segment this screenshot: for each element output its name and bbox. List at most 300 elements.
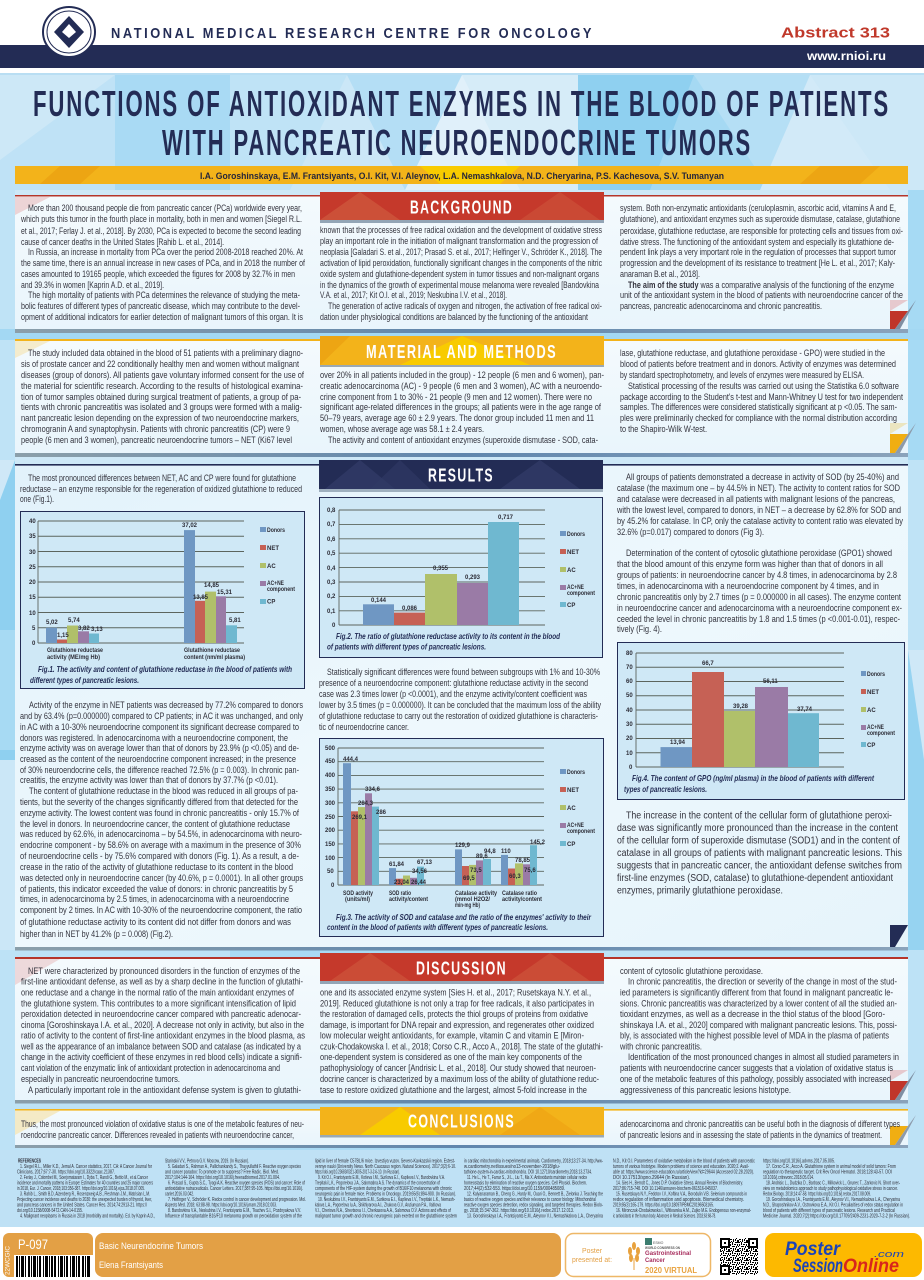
text: discussion middle column: 2019]. Reduced glutathione is not only a trap for free radicals, it also participates in	[320, 998, 594, 1008]
panel: material and methods	[15, 336, 916, 457]
text: results middle column: lower by 3.5 times (p = 0.000000). It can be concluded that the maximum loss of the ability	[319, 700, 601, 710]
caption: figure 4: types of pancreatic lesions.	[624, 784, 707, 794]
text: methods middle column: crine component from 1 to 30% - 21 people (9 men and 12 women). There were no	[320, 392, 592, 402]
panel: results	[15, 460, 908, 950]
heading: conclusions	[320, 1107, 604, 1138]
caption: figure 2: Fig.2. The ratio of glutathione reductase activity to its content in the blood	[336, 631, 561, 641]
icon: wheat	[628, 1242, 640, 1270]
axis and value labels: activity/content	[502, 897, 542, 903]
authors bar	[15, 166, 908, 184]
axis and value labels: min-mg Hb)	[455, 903, 480, 909]
text: background left column: and 39.3% in women [Kaprin A.D. et al., 2019].	[21, 280, 164, 290]
axis and value labels: 0,144	[371, 598, 387, 604]
text: methods left column: tients with chronic pancreatitis was isolated and 3 groups were formed with a malig-	[21, 402, 302, 412]
text: discussion middle column: czuk-Chodakowska I. et al., 2018; Corso C.R., Acco A., 2018]. The state of the glutathi-	[320, 1042, 603, 1052]
axis and value labels: 0,1	[327, 609, 336, 615]
references: N.D., Kit O.I. Parameters of oxidative metabolism in the blood of patients with pancreatic	[613, 1158, 755, 1164]
axis and value labels: 80	[626, 651, 633, 657]
text: results intro: The most pronounced differences between NET, AC and CP were found for glutathione	[28, 473, 296, 483]
title	[33, 83, 890, 163]
footer: congress badge: WORLD CONGRESS ON	[645, 1246, 680, 1250]
text: methods right column: to the Shapiro-Wilk W-test.	[620, 424, 707, 434]
text: results middle column: of glutathione reductase to carry out the restoration of oxidized glutathione is characteris-	[319, 711, 598, 721]
abstract number: Abstract 313	[781, 24, 890, 42]
axis and value labels: 50	[327, 869, 334, 875]
axis and value labels: Glutathione reductase	[184, 648, 241, 654]
axis and value labels: 78,85	[515, 858, 531, 864]
axis and value labels: 0,717	[498, 515, 514, 521]
bars: catalase activity	[455, 849, 491, 885]
axis and value labels: Glutathione reductase	[47, 648, 104, 654]
axis and value labels: 14,85	[204, 583, 220, 589]
legend: component	[567, 829, 595, 835]
footer: category and author	[95, 1233, 561, 1277]
text: results intro	[20, 473, 302, 504]
text: background left column: the same time, there is an annual increase in new cases of PCa, and in 2018 the number of	[21, 258, 305, 268]
text: conclusions left column: roendocrine pancreatic cancer. Differences revealed in patients with neuroendocrine cancer,	[21, 1130, 294, 1140]
axis and value labels: SOD activity	[343, 891, 374, 897]
axis and value labels: 200	[325, 828, 336, 834]
axis and value labels: 15,31	[217, 590, 233, 596]
text: conclusions right column	[620, 1119, 900, 1140]
references: ic antioxidants in the human body. Advances in Medical Sciences. 2018;63:68-78.	[613, 1214, 716, 1220]
text: background right column with aim	[620, 203, 903, 311]
text: results right column conclusion: The increase in the content of the cellular form of glutathione peroxi-	[626, 810, 892, 822]
references: REFERENCES	[18, 1158, 41, 1164]
references: 4. Malignant neoplasms in Russia in 2018 (morbidity and mortality). Ed. by Kaprin A.D.,	[20, 1214, 155, 1220]
bars: SOD activity	[343, 763, 379, 885]
footer: congress badge: Cancer	[645, 1257, 665, 1264]
text: results left column: the level in donors. In neuroendocrine cancer, the content of glutathione reductase	[20, 819, 290, 829]
caption: figure 3: content in the blood of patients with different types of pancreatic lesions.	[327, 922, 548, 932]
axis and value labels: 0,7	[327, 522, 336, 528]
text: results left column: donors was registered. In adenocarcinoma with a neuroendocrine component, the	[20, 733, 288, 743]
footer: category and author: Elena Frantsiyants	[99, 1260, 163, 1270]
axis and value labels: 75,6	[524, 868, 536, 874]
axis and value labels: 450	[325, 759, 336, 765]
axis and value labels: 10	[626, 751, 633, 757]
text: discussion right column: content of cytosolic glutathione peroxidase.	[620, 966, 763, 976]
text: discussion middle column: docrine cancer is characterized by a maximum loss of the ability of glutathione reduc-	[320, 1074, 599, 1084]
references: https://doi.org/10.1016/j.advms.2017.05.005.	[763, 1158, 835, 1164]
references: homeostasis by elimination of reactive oxygen species. Cell Physiol. Biochem.	[464, 1180, 587, 1186]
text: discussion left column: well as the appearance of an imbalance between SOD and catalase (as indicated by a	[20, 1042, 301, 1052]
text: discussion right column	[619, 966, 899, 1095]
axis and value labels: 10	[29, 611, 36, 617]
text: discussion middle column: low molecular weight antioxidants, for example, vitamin C and vitamin E [Miron-	[320, 1030, 584, 1040]
caption: figure 1: Fig.1. The activity and content of glutathione reductase in the blood of patients with	[38, 664, 292, 674]
bars: activity	[46, 626, 99, 643]
references: tathione-system-in-cardiac-mitochondria. DOI 10.12710/cardiometry.2018.13.2734.	[464, 1170, 592, 1176]
bars: content	[184, 530, 237, 643]
references: antioxidative nutraceuticals. Cancer Letters. 2017;387:95-105. https://doi.org/10.1016/j.	[165, 1186, 303, 1192]
text: methods middle column	[319, 370, 604, 445]
legend: NET	[567, 788, 579, 794]
legend: AC	[267, 564, 276, 570]
text: background left column: The high mortality of patients with PCa determines the relevance of studying the meta-	[28, 290, 300, 300]
text: discussion middle column: the restoration of damaged cells, protects the thiol groups of proteins from oxidative	[320, 1009, 588, 1019]
axis and value labels: 13,85	[193, 595, 209, 601]
legend	[560, 769, 595, 848]
axis and value labels: 150	[325, 842, 336, 848]
axis and value labels: 269,1	[352, 815, 368, 821]
caption: figure 1: different types of pancreatic lesions.	[30, 675, 139, 685]
references: V.I., Cheriova N.A., Shevtsova I.I., Cherkasova A.A., Salomova O.V. Actions and effects of	[315, 1208, 451, 1214]
footer: congress badge: ESMO	[653, 1241, 664, 1245]
text: background middle column: activation of lipid peroxidation, functionally significant changes in the components of the nitric	[320, 258, 602, 268]
text: results middle column: Statistically significant differences were found between subgroups with 1% and 10-30%	[327, 667, 600, 677]
text: background left column: et al., 2017; Ferlay J. et al., 2018]. By 2030, PCa is expected to become the second leading	[21, 226, 301, 236]
references: 12. Kalyanaraman B., Cheng G., Hardy M., Ouari O., Bennett B., Zielonka J. Teaching the	[467, 1192, 603, 1198]
text: discussion left column: A particularly important role in the antioxidant defense system is given to glutathi-	[28, 1085, 301, 1095]
text: background middle column: play an important role in the initiation of malignant transformation and the progression of	[320, 236, 598, 246]
chart: figure 1 glutathione reductase	[20, 512, 304, 688]
references: DOI 10.17513/spno.29644 (In Russian).	[613, 1175, 690, 1181]
axis and value labels: Catalase ratio	[502, 891, 537, 897]
caption: figure 3	[327, 912, 592, 932]
footer background	[0, 1227, 924, 1280]
text: background left column: opment of additional indicators for earlier detection of malignant tumors of this organ. It is	[21, 312, 303, 322]
axis and value labels: 40	[626, 708, 633, 714]
text: methods left column: sis of prostate cancer and 22 conditionally healthy men and women without malignant	[21, 359, 299, 369]
axis and value labels: 23,04	[394, 880, 410, 886]
references: redox regulation of inflammation and apoptosis. Biomedical chemistry.	[613, 1197, 744, 1203]
references: incidence and mortality patterns in Europe: Estimates for 40 countries and 25 major cancers	[17, 1180, 153, 1186]
text: background middle column: in the dynamics of the growth of experimental mouse melanoma were revealed [Bandovkina	[320, 280, 599, 290]
axis and value labels: 0	[332, 623, 336, 629]
axis and value labels: 286	[376, 810, 387, 816]
caption: figure 4	[624, 773, 875, 794]
axis and value labels: 13,94	[670, 740, 686, 746]
panel: discussion	[15, 953, 916, 1104]
references: 13. Goroshinskaya I.A., Frantsiyants E.M., Aleynov V.I., Nemashkalova L.A., Cheryarina	[467, 1214, 603, 1220]
footer: category and author: Basic Neurendocrine Tumors	[99, 1241, 203, 1251]
axis and value labels: 0	[32, 641, 36, 647]
text: results middle column	[319, 667, 601, 732]
text: methods middle column: over 20% in all patients included in the group) - 12 people (6 men and 6 women), pan-	[320, 370, 604, 380]
bars: GPO content	[660, 672, 819, 767]
legend	[560, 531, 595, 609]
references: 15. Rusetskaya N.Y., Fedotov I.V., Koftina V.A., Borodulin V.B. Selenium compounds in	[616, 1192, 747, 1198]
text: discussion middle column: tase to restore oxidized glutathione and the largest, almost 5-fold increase in the	[320, 1085, 587, 1095]
legend	[861, 671, 895, 749]
references: reactive oxygen species detection, redox signaling, and targeted therapies. Redox Biolo-	[464, 1202, 603, 1208]
text: discussion left column: NET were characterized by pronounced disorders in the function of enzymes of the	[28, 966, 300, 976]
text: methods middle column: 50–79 years, average age 60 ± 2.9 years. The donor group included 11 men and 11	[320, 413, 594, 423]
text: discussion middle column: pathophysiology of cancer [Andrisic L. et al., 2018]. Our study showed that neuroen-	[320, 1063, 596, 1073]
text: results left column: of 30% neuroendocrine cells, the difference reached 72.5% (p = 0.003). In chronic pan-	[20, 765, 299, 775]
legend: CP	[567, 603, 575, 609]
text: results left column: tients, but the severity of the changes significantly differed from that detected for the	[20, 797, 298, 807]
authors bar: I.A. Goroshinskaya, E.M. Frantsiyants, O.I. Kit, V.I. Aleynov, L.A. Nemashkalova, N.D. Cheryarina, P.S. Kachesova, S.V. Tumanyan	[200, 171, 724, 181]
text: results left column: endocrine component - by 58.6% on average with a maximum in the presence of 30%	[20, 840, 301, 850]
text: discussion left column: first-line antioxidant defense, as well as by a sharp decline in the function of glutathi-	[21, 976, 303, 986]
references: 10.1016/j.critrevonc.2018.05.014.	[763, 1175, 814, 1181]
text: background middle column: dation under physiological conditions are balanced by the functioning of the antioxidant	[320, 312, 588, 322]
axis and value labels: 15	[29, 595, 36, 601]
axis and value labels: 0,355	[433, 566, 449, 572]
bars: ratio	[363, 522, 519, 625]
header band	[0, 0, 924, 73]
text: background middle column: V.A. et al., 2017; Kit O.I. et al., 2019; Neskubina I.V. et al., 2018].	[320, 290, 507, 300]
heading: material and methods	[320, 336, 604, 367]
references: 7. Helfinger V., Schröder K. Redox control in cancer development and progression. Mol.	[168, 1197, 306, 1203]
text: methods middle column: women, whose average age was 58.1 ± 2.4 years.	[319, 424, 484, 434]
legend: component	[267, 587, 295, 593]
axis and value labels: 89,6	[476, 854, 488, 860]
axis and value labels: activity/content	[389, 897, 428, 903]
heading: discussion: DISCUSSION	[416, 958, 507, 978]
text: results left column: times, in adenocarcinoma by 2.5 times, in adenocarcinoma with a neuroendocrine	[20, 894, 289, 904]
references: 16. Mironczuk-Chodakowska I., Witkowska A.M., Zujko M.E. Endogenous non-enzymat-	[616, 1208, 751, 1214]
text: background left column: In Russia, an increase in mortality from PCa over the period 2008-2018 reached 20%. At	[28, 247, 303, 257]
heading: background	[320, 192, 604, 223]
text: results right column upper: that the blood amount of this enzyme form was higher than that of donors in all	[617, 559, 883, 569]
text: results right column upper: 32.6% (p=0.017) compared to donors (Fig 3).	[617, 527, 764, 537]
axis and value labels: 69,5	[463, 876, 475, 882]
references: 5. Galadari S., Rahman A., Pallichankandy S., Thayyullathil F. Reactive oxygen species	[168, 1164, 301, 1170]
axis and value labels: 284,3	[358, 801, 374, 807]
axis and value labels: 61,84	[389, 862, 405, 868]
references: gy. 2018;15:347-362. https://doi.org/10.1016/j.redox.2017.12.013.	[464, 1208, 574, 1214]
axis and value labels: 67,13	[417, 860, 433, 866]
text: discussion left column: cinoma [Goroshinskaya I.A. et al., 2020]. A decrease not only in activity, but also in the	[21, 1020, 304, 1030]
footer: PosterSessionOnline logo: .com	[874, 1249, 905, 1259]
text: discussion right column: aggressiveness of this pancreatic lesions histotype.	[620, 1085, 791, 1095]
axis and value labels: 100	[325, 856, 336, 862]
legend: AC+NE	[867, 725, 884, 731]
text: results intro: one (Fig.1).	[20, 494, 54, 504]
text: results right column conclusion: first-line enzymes (SOD, catalase) to glutathione-dependent antioxidant	[617, 873, 893, 884]
references: able at: https://www.science-education.ru/article/view?id=29644 (Accessed 02.28.2020).	[613, 1170, 754, 1176]
legend: Donors	[567, 770, 586, 776]
footer: congress badge: Poster	[582, 1248, 603, 1255]
axis and value labels: 94,8	[484, 849, 496, 855]
axis and value labels: Catalase activity	[455, 891, 498, 897]
axis and value labels: 73,5	[470, 868, 482, 874]
institute name: NATIONAL MEDICAL RESEARCH CENTRE FOR ONCOLOGY	[111, 25, 594, 42]
axis and value labels	[626, 651, 813, 771]
text: results left column: and by 63.4% (p=0.000000) compared to CP patients; in AC it was unchanged, and only	[20, 711, 303, 721]
bars: SOD ratio	[389, 867, 424, 885]
axis and value labels: 350	[325, 787, 336, 793]
chart: figure 2 ratio	[320, 498, 602, 658]
references: 2. Ferlay J., Colombet M., Soerjomataram I., Dyba T., Randi G., Bettio M., et al.Cancer	[20, 1175, 148, 1181]
legend: CP	[267, 600, 275, 606]
references: 2017;104:144-164. https://doi.org/10.1016/j.freeradbiomed.2017.01.004.	[165, 1175, 280, 1181]
text: methods left column: nant pancreatic lesion depending on the expression of two neuroendocrine markers,	[21, 413, 299, 423]
legend: CP	[867, 743, 875, 749]
heading: material and methods: MATERIAL AND METHODS	[366, 342, 557, 362]
heading: results: RESULTS	[428, 466, 494, 486]
text: methods left column: The study included data obtained in the blood of 51 patients with a preliminary diagno-	[28, 348, 303, 358]
text: results left column: crease in the ratio of the activity of glutathione reductase to its content in the blood	[20, 862, 293, 872]
panel: conclusions	[15, 1107, 916, 1148]
text: methods left column: tion of tumor samples obtained during surgical treatment of patients, a group of pa-	[21, 392, 301, 402]
axis and value labels: 5,81	[229, 618, 241, 624]
axis and value labels: content (nm/ml plasma)	[184, 655, 245, 661]
text: conclusions left column	[21, 1119, 304, 1140]
axis and value labels: 40	[29, 519, 36, 525]
text: results right column upper	[616, 472, 903, 634]
references: 2017;86:715-748. DOI 10.1146/annurev-biochem-061516-045037.	[613, 1186, 718, 1192]
text: methods left column: chromogranin A and synaptophysin. Patients with chronic pancreatitis (CP) were 9	[21, 424, 290, 434]
references: in 2018, Eur. J. Cancer, 2018;103:356-387. https://doi.org/10.1016/j.ejca.2018.07.005.	[17, 1186, 145, 1192]
text: background middle column	[320, 225, 602, 322]
legend: Donors	[867, 672, 886, 678]
references: 10. Neskubina I.V., Frantsiyants E.M., Surikova E.I., Kaplieva I.V., Trepitaki L.K., Nemash-	[318, 1197, 455, 1203]
axis and value labels	[325, 746, 546, 909]
text: discussion left column: cant violation of the enzymatic link of antioxidant protection in adenocarcinoma and	[21, 1063, 280, 1073]
caption: figure 1	[30, 664, 292, 685]
text: conclusions left column: Thus, the most pronounced violation of oxidative status is one of the metabolic features of neu-	[21, 1119, 304, 1129]
text: results left column: creased as the content of the neuroendocrine component increased; in the presence	[20, 754, 296, 764]
text: results right column upper: tively (Fig. 4).	[617, 624, 662, 634]
text: results left column: enzyme activity. The lowest content was found in chronic pancreatitis - only 15.7% of	[20, 808, 299, 818]
axis and value labels: SOD ratio	[389, 891, 411, 897]
text: results left column: was detected only in neuroendocrine cancer (by 40.6%, p = 0.0001). In all other groups	[19, 873, 303, 883]
legend: NET	[267, 546, 279, 552]
text: discussion left column: especially in pancreatic neuroendocrine tumors.	[21, 1074, 180, 1084]
text: background left column: which puts this tumor in the fourth place in mortality, both in men and women [Siegel R.L.	[20, 214, 302, 224]
text: discussion left column: ratio of activity to the content of first-line antioxidant enzymes in the blood plasma, as	[21, 1030, 305, 1040]
references: Influence of transplantable B16/F10 melanoma growth on peroxidation system of the	[165, 1214, 302, 1220]
legend: AC	[567, 568, 576, 574]
axis and value labels: 39,28	[733, 704, 749, 710]
references: in cardiac mitochondria in experimental animals. Cardiometry, 2018;13:27-34. http://ww-	[464, 1158, 603, 1164]
references: 2017;44(2):532-553. https://doi.org/10.1159/000485089.	[464, 1186, 565, 1192]
axis and value labels: 0	[629, 765, 633, 771]
axis and value labels: 35	[29, 534, 36, 540]
references: kalova L.A., Pogorelova Iu.A., Shikhlyarova A.I., Zhukova G.V., Arutiunyan P.A., Vaitkova	[315, 1202, 441, 1208]
references: components of the HIF-system during the growth of B16/F10 melanoma with chronic	[315, 1186, 452, 1192]
legend: NET	[567, 550, 579, 556]
text: results right column conclusion	[617, 810, 902, 896]
text: results intro: reductase – an enzyme responsible for the regeneration of oxidized glutathione to reduced	[20, 484, 302, 494]
axis and value labels: (mmol H2O2/	[455, 897, 490, 903]
footer: PosterSessionOnline logo	[765, 1233, 922, 1277]
text: discussion middle column: one-dependent system is considered as one of the main key components of the	[320, 1052, 582, 1062]
axis and value labels: 444,4	[343, 757, 359, 763]
references: lipid in liver of female C57BL/6 mice. Izvestiya vuzov. Severo-Kavkazskii region. Estest-	[315, 1158, 455, 1164]
axis and value labels: 500	[325, 746, 336, 752]
text: discussion right column: with chronic pancreatitis.	[619, 1042, 702, 1052]
axis and value labels: 37,74	[797, 707, 813, 713]
text: results right column upper: times, in adenocarcinoma with a neuroendocrine component by 4 times, and in	[617, 581, 879, 591]
text: results middle column: case was 2.3 times lower (p <0.0001), and the enzyme activity/content coefficient was	[319, 689, 587, 699]
references: 6. Prasad S., Gupta S.C., Tyagi A.K. Reactive oxygen species (ROS) and cancer: Role of	[168, 1180, 305, 1186]
text: results left column: of neuroendocrine cells - by 75.6% compared with donors (Fig. 1). As a result, a de-	[20, 851, 299, 861]
text: results left column: component by 2 times. In AC with 10-30% of the neuroendocrine component, the ratio	[20, 905, 302, 915]
heading: background: BACKGROUND	[410, 198, 513, 218]
references	[17, 1158, 910, 1220]
footer: PosterSessionOnline logo: Online	[843, 1256, 899, 1277]
text: background left column	[20, 203, 305, 322]
axis and value labels: 5,02	[46, 620, 58, 626]
text: results left column: enzyme activity was on average lower than that of donors by 23.9% (p <0.05) and de-	[20, 743, 299, 753]
references: basics of reactive oxygen species and their relevance to cancer biology: Mitochondrial	[464, 1197, 596, 1203]
axis and value labels: 60	[626, 679, 633, 685]
axis and value labels: 334,6	[365, 787, 381, 793]
footer: congress badge: presented at:	[572, 1257, 612, 1264]
text: background middle column: neoplasia [Galadari S. et al., 2017; Prasad S. et al., 2017; Helfinger V., Schröder K., 2018]. The	[320, 247, 602, 257]
text: background left column: cause of cancer deaths in the United States [Rahib L. et al., 2014].	[21, 237, 224, 247]
axis and value labels: 3,13	[91, 627, 103, 633]
references: and pancreas cancers in the United States. Cancer Res. 2014;74:2913-21. https://	[17, 1202, 147, 1208]
caption: figure 2	[327, 631, 561, 652]
text: background right column with aim: pancreas, pancreatic adenocarcinoma and chronic pancreatitis.	[620, 301, 822, 311]
axis and value labels: 60,3	[509, 874, 521, 880]
text: background middle column: known that the processes of free radical oxidation and the development of oxidative stress	[320, 225, 602, 235]
legend: AC+NE	[267, 581, 284, 587]
heading: conclusions: CONCLUSIONS	[408, 1112, 515, 1132]
text: results left column: The content of glutathione reductase in the blood was reduced in all groups of pa-	[29, 786, 298, 796]
text: results right column conclusion: enzymes, primarily glutathione peroxidase.	[617, 886, 783, 896]
text: results left column: higher than in NET by 41.2% (p = 0.008) (Fig.2).	[20, 929, 173, 939]
text: methods right column	[620, 348, 903, 434]
axis and value labels: 0,2	[327, 594, 336, 600]
axis and value labels	[29, 519, 245, 661]
axis and value labels: 0,6	[327, 537, 336, 543]
website: www.rnioi.ru	[806, 49, 886, 63]
footer: congress badge: Gastrointestinal	[645, 1250, 691, 1257]
heading: results	[319, 460, 603, 492]
legend: AC+NE	[567, 823, 584, 829]
footer: PosterSessionOnline logo: Session	[793, 1256, 843, 1277]
axis and value labels: 400	[325, 773, 336, 779]
axis and value labels: 66,7	[702, 661, 714, 667]
references: Aspects Med. 2018; 63:88-98. https://doi.org/10.1016/j.mam.2018.02.003.	[165, 1202, 277, 1208]
legend: component	[867, 731, 895, 737]
references: malignant tumor growth and chronic neurogenic pain exerted on the glutathione system	[315, 1214, 457, 1220]
references: 1. Siegel R.L., Miller K.D., Jemal A. Cancer statistics, 2017. CA: A Cancer Journal for	[20, 1164, 152, 1170]
references: 11. He L., He T., Farrar S., Ji L., Liu T., Ma X. Antioxidants maintain cellular redox	[467, 1175, 587, 1181]
legend: Donors	[567, 532, 586, 538]
caption: figure 3: Fig.3. The activity of SOD and catalase and the ratio of the enzymes' activity to their	[336, 912, 592, 922]
text: discussion right column: tioxidant enzymes, as well as a decrease in the thiol status of the blood [Goro-	[620, 1009, 885, 1019]
text: methods left column: the material for scientific research. According to the results of histological examina-	[21, 381, 303, 391]
text: discussion left column: peroxidation detected in neuroendocrine cancer compared with pancreatic adenocar-	[21, 1009, 301, 1019]
legend: component	[567, 591, 595, 597]
references: tumors of various histotype. Modern problems of science and education. 2020;2. Avail-	[613, 1164, 749, 1170]
footer: QR code	[720, 1238, 758, 1275]
axis and value labels: 0,293	[465, 575, 481, 581]
text: results left column	[19, 700, 303, 939]
text: results left column: Activity of the enzyme in NET patients was decreased by 77.2% compared to donors	[29, 700, 303, 710]
footer: PosterSessionOnline logo: Poster	[785, 1239, 841, 1260]
text: results middle column: presence of a neuroendocrine component: glutathione reductase activity in the second	[319, 678, 588, 688]
axis and value labels: 0,086	[402, 606, 418, 612]
references: Trepitaki L.K., Pogorelova J.A., Salomatina A.S. The dynamics of the concentration of	[315, 1180, 440, 1186]
text: results left column: creatitis, the enzyme activity was lower than that of donors by 37.7% (p <0.01).	[20, 775, 278, 785]
text: discussion left column: one reductase and a change in the normal ratio of the main antioxidant enzymes of	[21, 988, 294, 998]
references: neurogenic pain in female mice. Problems in Oncology. 2019;65(6):894-900. (In Russian).	[315, 1192, 456, 1198]
axis and value labels: 0	[331, 883, 335, 889]
text: discussion middle column	[320, 988, 603, 1095]
footer: congress badge	[566, 1234, 710, 1276]
axis and value labels: 34,56	[412, 869, 428, 875]
axis and value labels: 70	[626, 665, 633, 671]
legend: AC+NE	[567, 585, 584, 591]
axis and value labels: 129,9	[455, 843, 471, 849]
axis and value labels: 50	[626, 693, 633, 699]
caption: figure 2: of patients with different types of pancreatic lesions.	[327, 642, 486, 652]
text: background right column with aim: anaraman B.et al., 2018].	[620, 269, 700, 279]
axis and value labels: 1,15	[57, 633, 69, 639]
text: methods middle column: creatic adenocarcinoma (AC) - 9 people (6 men and 3 women), AC with a neuroendo-	[320, 381, 602, 391]
axis and value labels: 20	[626, 736, 633, 742]
footer: poster id and barcode: 22WCGIC	[4, 1246, 12, 1275]
